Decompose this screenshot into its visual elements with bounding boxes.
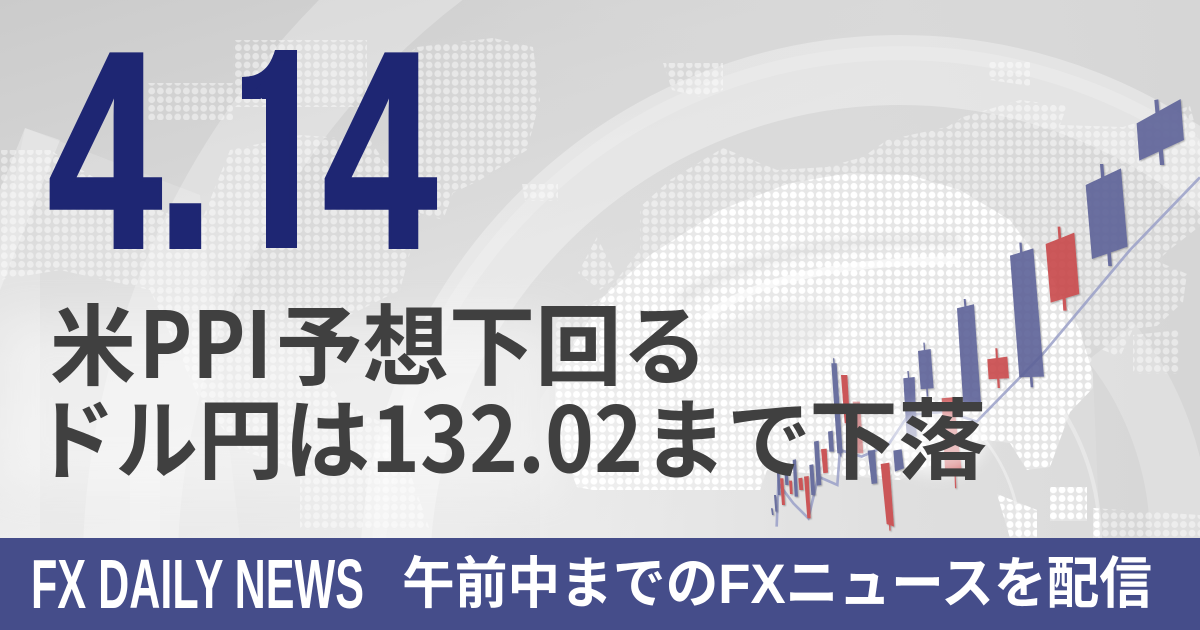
date heading: 4 xyxy=(48,0,162,306)
headline line 1 xyxy=(50,272,708,405)
headline line 1: PPI xyxy=(139,272,272,405)
headline line 2: 円は xyxy=(198,371,370,498)
trend line xyxy=(777,177,1200,527)
white haze behind heading xyxy=(887,405,987,475)
headline xyxy=(33,272,987,498)
footer brand: FX DAILY NEWS xyxy=(31,545,364,623)
footer tagline: 午前中までのFXニュースを配信 xyxy=(402,552,1152,615)
headline line 1: 予想下回る xyxy=(276,277,708,404)
headline line 2: 132.02 xyxy=(371,368,643,498)
small candles, left side xyxy=(771,358,904,531)
candlestick chart xyxy=(771,99,1200,531)
soft light behind headline xyxy=(0,320,560,490)
footer bar xyxy=(0,538,1200,630)
headline line 2 xyxy=(33,368,987,498)
headline line 2: 下落 xyxy=(809,371,987,498)
date heading: . xyxy=(157,0,214,306)
headline line 1: 米 xyxy=(50,277,136,404)
globe sheen xyxy=(679,235,960,368)
date heading: 4 xyxy=(323,0,437,306)
date heading: 1 xyxy=(219,0,331,307)
left light streaks xyxy=(0,128,240,538)
headline line 2: ドル xyxy=(33,371,198,498)
red candles, right side xyxy=(942,227,1079,488)
blue candles, right side xyxy=(903,99,1184,437)
headline line 2: まで xyxy=(643,371,811,498)
date heading xyxy=(50,50,438,249)
